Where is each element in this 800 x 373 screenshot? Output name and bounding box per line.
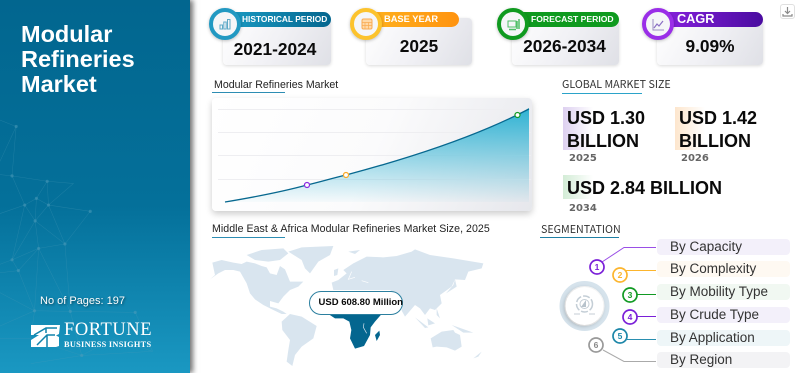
row: application xyxy=(657,330,790,346)
panel: line chart xyxy=(212,98,532,211)
panel: sidebar xyxy=(0,0,190,373)
row: mobility type xyxy=(657,284,790,300)
callout: regional value: USD 608.80 Million xyxy=(318,297,403,308)
numbered nodes: 2 xyxy=(618,270,623,280)
heading: map: Middle East & Africa Modular Refineries Market Size, 2025 xyxy=(212,223,490,235)
icon: download xyxy=(780,4,795,19)
icon: forecast ring xyxy=(497,8,529,40)
pill label: HISTORICAL PERIOD xyxy=(242,14,327,24)
row: region: By Region xyxy=(670,352,732,367)
stat: 2025 size: 2025 xyxy=(569,153,597,164)
stat: forecast period xyxy=(496,8,620,67)
card: 2025 xyxy=(400,36,438,56)
segmentation connectors and nodes xyxy=(560,247,656,362)
area chart xyxy=(218,108,530,203)
row: region xyxy=(657,352,790,368)
heading: segmentation: SEGMENTATION xyxy=(541,222,621,237)
title: Market xyxy=(21,71,97,97)
row: crude type: By Crude Type xyxy=(670,307,759,322)
world map xyxy=(210,246,484,366)
pill label: FORECAST PERIOD xyxy=(531,14,614,24)
icon: logo mark xyxy=(31,325,60,347)
logo wordmark: BUSINESS INSIGHTS xyxy=(64,340,151,349)
stat: 2034 size: 2034 xyxy=(569,203,597,214)
pill label xyxy=(513,12,619,27)
row: mobility type: By Mobility Type xyxy=(670,284,768,299)
center hub xyxy=(562,284,607,328)
row: application: By Application xyxy=(670,330,755,345)
row: complexity: By Complexity xyxy=(670,261,756,276)
numbered nodes: 3 xyxy=(628,290,633,300)
highlighted region: Africa xyxy=(328,314,382,349)
logo xyxy=(31,320,152,349)
card xyxy=(366,18,472,65)
stat: 2034 size xyxy=(563,175,722,214)
stat: 2026 size xyxy=(675,107,757,164)
numbered nodes xyxy=(589,260,637,352)
numbered nodes: 1 xyxy=(595,262,600,272)
stat: base year xyxy=(348,8,473,67)
logo wordmark xyxy=(64,320,152,349)
stat: 2025 size: BILLION xyxy=(567,130,639,150)
stat: 2034 size: USD 2.84 BILLION xyxy=(567,178,722,198)
heading: line chart: Modular Refineries Market xyxy=(214,79,338,91)
icon: bar chart ring xyxy=(209,8,241,40)
numbered nodes: 6 xyxy=(594,340,599,350)
row: crude type xyxy=(657,307,790,323)
stat: historical period xyxy=(208,8,332,67)
pill label xyxy=(366,12,459,27)
icon: calendar ring xyxy=(350,8,382,40)
pill label xyxy=(658,12,763,27)
title: Modular xyxy=(21,21,112,47)
stat: 2026 size: BILLION xyxy=(679,130,751,150)
logo wordmark: FORTUNE xyxy=(64,320,152,340)
card: 2026-2034 xyxy=(523,36,606,56)
pill label: BASE YEAR xyxy=(384,14,438,24)
card xyxy=(657,18,763,65)
numbered nodes: 5 xyxy=(618,331,623,341)
pill label: CAGR xyxy=(677,12,714,26)
row: capacity: By Capacity xyxy=(670,239,742,254)
callout: regional value xyxy=(309,291,403,315)
stat: 2025 size: USD 1.30 xyxy=(567,108,645,128)
pill label xyxy=(225,12,331,27)
title xyxy=(21,21,135,97)
row: complexity xyxy=(657,261,790,277)
icon: growth ring xyxy=(642,8,674,40)
network pattern xyxy=(0,120,153,364)
card xyxy=(223,18,331,65)
stat: CAGR xyxy=(640,8,764,67)
title: Refineries xyxy=(21,46,135,72)
pages count: No of Pages: 197 xyxy=(40,295,125,307)
card: 9.09% xyxy=(685,36,734,56)
stat: 2026 size: USD 1.42 xyxy=(679,108,757,128)
stat: 2026 size: 2026 xyxy=(681,153,709,164)
row: capacity xyxy=(657,239,790,255)
stat: 2025 size xyxy=(563,107,645,164)
numbered nodes: 4 xyxy=(628,312,633,322)
card xyxy=(512,18,619,65)
heading: global market size: GLOBAL MARKET SIZE xyxy=(562,77,671,92)
card: 2021-2024 xyxy=(234,39,316,59)
